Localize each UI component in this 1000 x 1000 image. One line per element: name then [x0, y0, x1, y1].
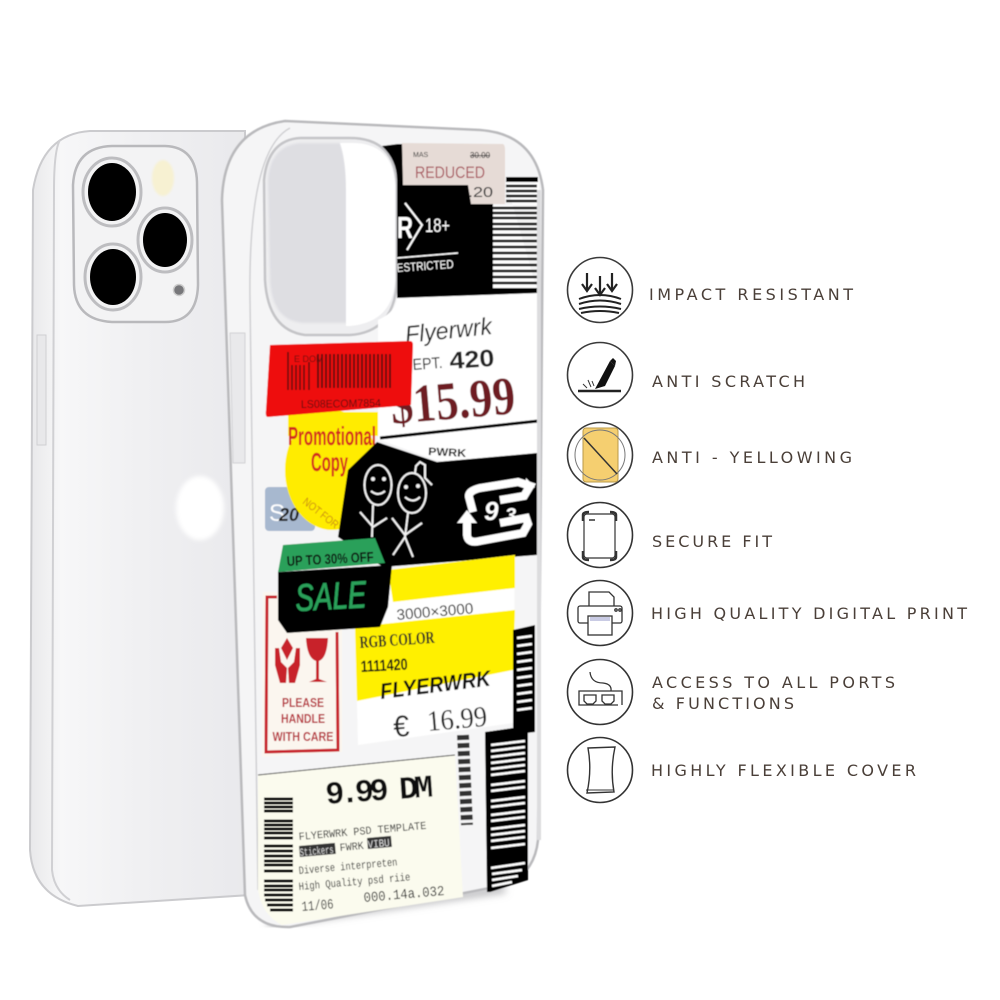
- icon: printer: [568, 580, 632, 646]
- sticker: sale: SALE: [294, 574, 368, 620]
- sticker: restricted 18+: 18+: [425, 216, 450, 237]
- feature: access to all ports and functions: [568, 660, 895, 724]
- sticker: please handle with care: PLEASE: [282, 695, 324, 710]
- icon: recycling mark: [457, 478, 535, 542]
- sticker: promotional copy: Promotional: [288, 421, 376, 451]
- sticker: yellow price label: 1111420: [360, 657, 408, 676]
- sticker: sale: UP TO 30% OFF: [286, 548, 374, 569]
- sticker: stick figures and recycle mark: [338, 442, 537, 567]
- sticker: yellow price label: RGB COLOR: [359, 628, 436, 652]
- feature: highly flexible cover: [568, 738, 916, 802]
- sticker: Flyerwrk price label: [378, 293, 541, 462]
- icon: yellow case: [568, 422, 632, 488]
- back view of phone case: [30, 131, 250, 906]
- icon: blade scratch: [568, 342, 632, 408]
- sticker: yellow price label: FLYERWRK: [379, 665, 494, 704]
- sticker: 9.99 DM label: FWRK: [339, 841, 365, 855]
- sticker: 9.99 DM label: 11/06: [301, 897, 334, 916]
- sticker: red barcode: [266, 341, 413, 417]
- sticker: Flyerwrk price label: EPT.: [412, 355, 443, 374]
- feature: secure fit: [568, 502, 772, 568]
- sticker: restricted 18+: [382, 144, 493, 300]
- sticker: promotional copy: Copy: [311, 447, 348, 477]
- sticker: small blue tag: S: [269, 500, 285, 527]
- sticker: 9.99 DM label: Stickers: [299, 845, 334, 860]
- barcode: label: [264, 799, 293, 910]
- feature: access to all ports and functions: & FUNCTIONS: [652, 694, 794, 713]
- sticker: reduced tag: MAS: [413, 152, 428, 159]
- barcode: top right: [493, 177, 539, 297]
- sticker: please handle with care: WITH CARE: [272, 729, 334, 744]
- feature: anti scratch: ANTI SCRATCH: [652, 372, 805, 391]
- feature: anti yellowing: [568, 422, 852, 488]
- sticker: red barcode: LS08ECOM7854: [301, 398, 381, 411]
- icon: hands and glass: [275, 638, 328, 683]
- squiggle barcode: [463, 735, 467, 825]
- feature: high quality digital print: HIGH QUALITY DIGITAL PRINT: [651, 604, 967, 623]
- feature: impact resistant: IMPACT RESISTANT: [649, 285, 853, 304]
- sticker: 9.99 DM label: FLYERWRK PSD TEMPLATE: [298, 821, 427, 844]
- sticker: yellow price label: [355, 555, 515, 745]
- sticker: yellow price label: 3000×3000: [396, 600, 474, 624]
- feature: secure fit: SECURE FIT: [652, 532, 772, 551]
- apple logo: [176, 476, 224, 540]
- sticker: promotional copy: [285, 410, 379, 531]
- sticker: 9.99 DM label: Diverse interpreten: [298, 857, 398, 878]
- sticker: please handle with care: [262, 592, 342, 757]
- feature: impact resistant: [568, 258, 853, 322]
- sticker: Flyerwrk price label: Flyerwrk: [404, 313, 495, 349]
- sticker: 9.99 DM label: High Quality psd riie: [298, 872, 411, 894]
- sticker: small blue tag: 20: [278, 505, 299, 525]
- sticker: please handle with care: HANDLE: [281, 711, 325, 726]
- sticker: 9.99 DM label: 000.14a.032: [363, 884, 445, 907]
- sticker: restricted 18+: ESTRICTED: [396, 257, 454, 275]
- feature: access to all ports and functions: ACCESS TO ALL PORTS: [652, 673, 895, 692]
- sticker: yellow price label: €: [392, 710, 411, 744]
- sticker: small blue tag: [265, 487, 315, 531]
- feature: high quality digital print: [568, 580, 967, 646]
- camera module: [73, 146, 198, 322]
- feature: highly flexible cover: HIGHLY FLEXIBLE COVER: [651, 761, 916, 780]
- sticker: restricted 18+: R: [397, 210, 413, 245]
- sticker: 9.99 DM label: 9.99 DM: [324, 770, 434, 814]
- icon: recycling mark: 9: [484, 496, 499, 526]
- sticker: 9.99 DM label: VIBU: [367, 838, 390, 852]
- sticker: red barcode: E DOM: [294, 354, 324, 364]
- icon: impact: [568, 258, 632, 322]
- camera cutout: [264, 138, 397, 335]
- sticker: 9.99 DM label: [258, 755, 463, 925]
- icon: recycling mark: 3: [505, 505, 516, 527]
- feature: anti yellowing: ANTI - YELLOWING: [652, 448, 852, 467]
- icon: flexible cover: [568, 738, 632, 802]
- sticker: Flyerwrk price label: PWRK: [428, 446, 466, 460]
- sticker: Flyerwrk price label: $15.99: [388, 365, 518, 436]
- sticker: reduced tag: [402, 143, 505, 204]
- front view of phone case: [222, 121, 543, 927]
- barcode: lower right: [485, 625, 535, 892]
- sticker: Flyerwrk price label: 420: [449, 345, 495, 375]
- sticker: reduced tag: 30.00: [470, 151, 491, 160]
- sticker: reduced tag: REDUCED: [415, 163, 485, 182]
- sticker: sale: [278, 538, 392, 633]
- icon: ports: [568, 660, 632, 724]
- sticker: yellow price label: 16.99: [426, 701, 488, 738]
- feature: anti scratch: [568, 342, 805, 408]
- sticker: promotional copy: NOT FOR: [300, 496, 341, 531]
- icon: bumper case: [568, 502, 632, 568]
- sticker: reduced tag: .20: [468, 184, 493, 201]
